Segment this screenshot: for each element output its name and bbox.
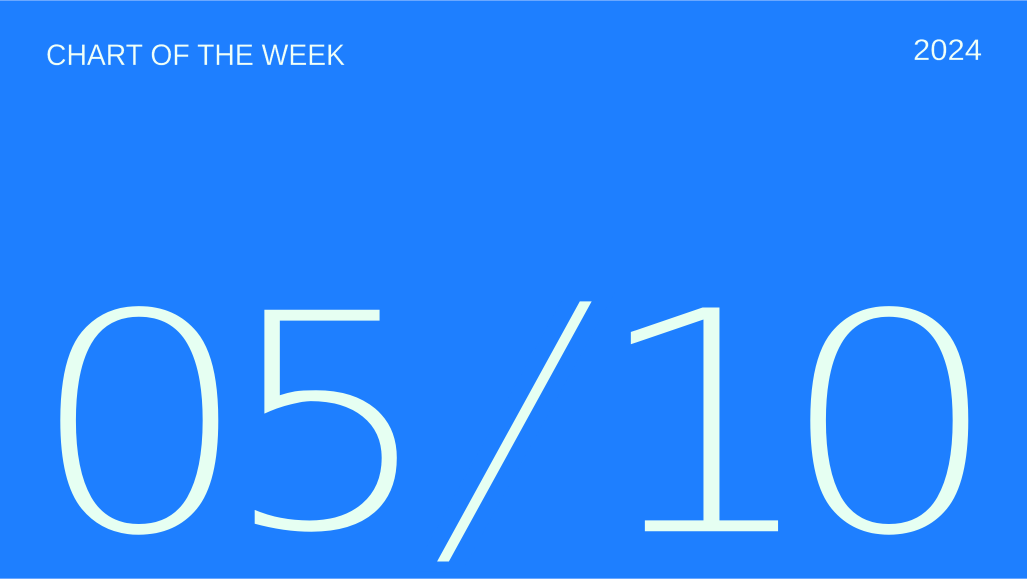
heading: chart of the week: CHART OF THE WEEK [46,39,345,72]
large date number 05/10 [28,231,1002,579]
year label: 2024 [913,34,982,67]
